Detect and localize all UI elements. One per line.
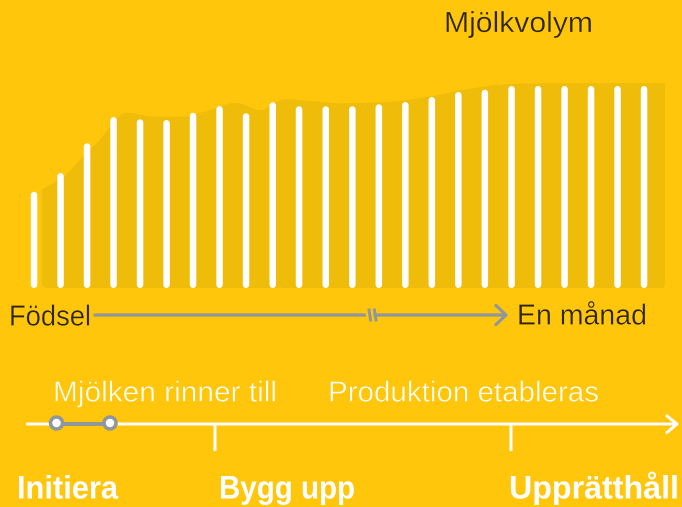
arrow: phase timeline (26, 416, 677, 451)
phase label: build up: Bygg upp (219, 470, 355, 506)
marker: milk comes in interval (50, 417, 116, 429)
phase label: initiate: Initiera (17, 470, 118, 506)
arrow: time axis with break (94, 306, 506, 324)
label: birth: Födsel (9, 300, 91, 332)
label: production established: Produktion etableras (328, 376, 599, 408)
label: milk comes in: Mjölken rinner till (53, 376, 277, 408)
phase label: maintain: Upprätthåll (509, 470, 679, 506)
area: milk volume trend (42, 83, 665, 288)
bar chart: daily milk volume (31, 86, 647, 288)
heading: milk volume: Mjölkvolym (444, 7, 593, 39)
label: one month: En månad (517, 300, 647, 332)
